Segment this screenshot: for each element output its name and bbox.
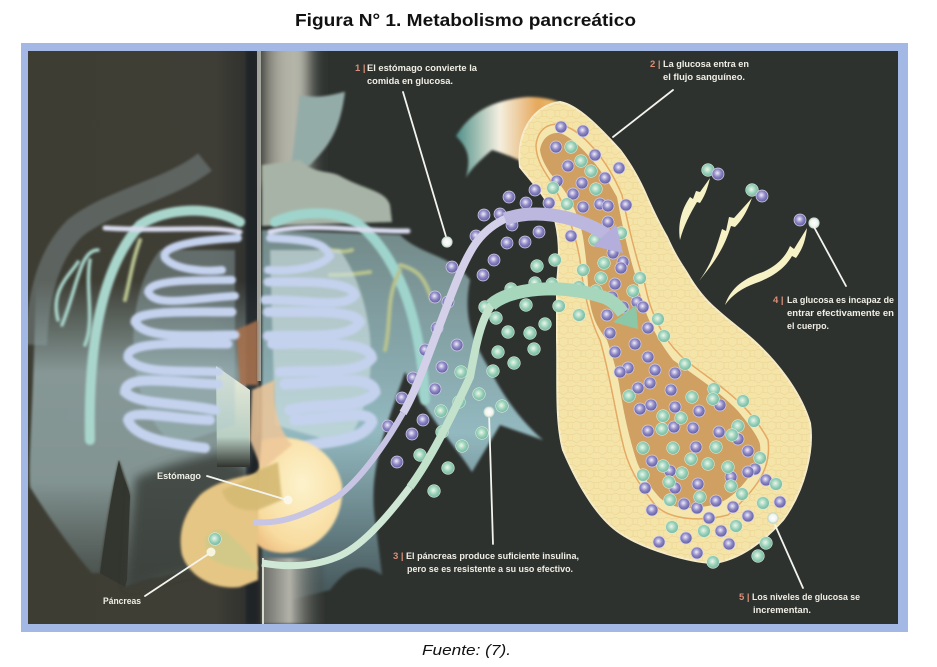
teal shoulder arcs xyxy=(56,211,432,440)
panel: blood vessel xyxy=(456,97,811,563)
abdomen shadow xyxy=(128,452,250,587)
esophagus xyxy=(250,380,292,470)
dark wedge between arm and torso xyxy=(100,460,130,587)
icon: pancreas xyxy=(181,462,282,587)
label 5: 5 | xyxy=(739,592,750,603)
leader endpoints xyxy=(206,236,495,556)
vessel lumen xyxy=(540,133,760,508)
title: Figura N° 1. Metabolismo pancreático xyxy=(295,10,636,30)
label 2: el flujo sanguíneo. xyxy=(663,72,745,83)
label: stomach: Estómago xyxy=(157,471,201,482)
label 1: 1 | xyxy=(355,63,366,74)
spine gutter xyxy=(236,51,324,624)
source caption: Fuente: (7). xyxy=(422,642,511,659)
neck xyxy=(262,40,392,226)
left shoulder band xyxy=(36,162,205,345)
vessel outer wall xyxy=(519,102,811,563)
label 3: pero se es resistente a su uso efectivo. xyxy=(407,564,573,575)
arrow: green insulin flow xyxy=(262,289,638,566)
leader lines xyxy=(145,90,846,596)
label 2: La glucosa entra en xyxy=(663,59,749,70)
label 3: 3 | xyxy=(393,551,404,562)
vessel inner wall xyxy=(536,124,769,519)
molecule pairs: glucose and insulin outside xyxy=(702,164,820,229)
label 4: entrar efectivamente en xyxy=(787,308,894,319)
label 4: 4 | xyxy=(773,295,784,306)
label: pancreas: Páncreas xyxy=(103,596,141,607)
molecules: glucose in vessel and floating xyxy=(382,121,786,568)
figure: human torso with skeleton xyxy=(30,40,543,624)
arrow: purple glucose flow xyxy=(253,214,623,522)
vessel flare xyxy=(456,97,565,178)
label 2: 2 | xyxy=(650,59,661,70)
label 1: El estómago convierte la xyxy=(367,63,478,74)
label 5: incrementan. xyxy=(753,605,811,616)
label 4: La glucosa es incapaz de xyxy=(787,295,894,306)
label 5: Los niveles de glucosa se xyxy=(752,592,860,603)
icon: stomach xyxy=(253,437,342,553)
label 1: comida en glucosa. xyxy=(367,76,453,87)
rib cage xyxy=(105,228,408,448)
arrows: wavy glucose rejected xyxy=(679,178,807,305)
label 4: el cuerpo. xyxy=(787,321,829,332)
label 3: El páncreas produce suficiente insulina, xyxy=(406,551,579,562)
body silhouette xyxy=(30,230,543,600)
hanging panel by the ribs xyxy=(216,366,250,467)
